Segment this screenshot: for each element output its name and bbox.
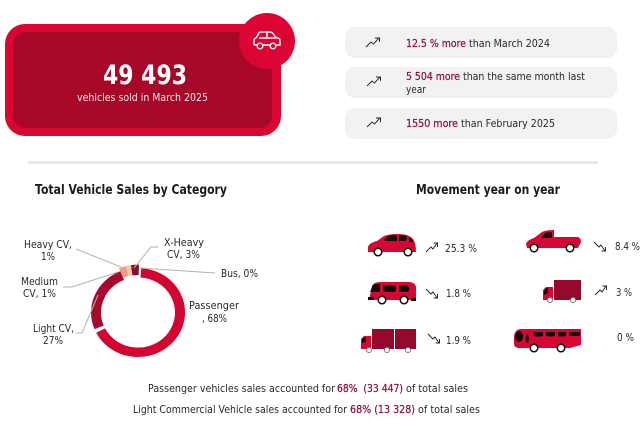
label: light CV: Light CV, xyxy=(33,322,74,335)
icon: long truck xyxy=(361,329,416,352)
label: bus: Bus, 0% xyxy=(221,267,258,280)
panel: change vs same month last year xyxy=(345,67,617,98)
icon: van xyxy=(368,282,416,304)
trend: pickup down xyxy=(594,240,640,253)
icon: bus xyxy=(514,329,581,352)
trend: long truck down: 1.9 % xyxy=(446,334,471,347)
leader lines xyxy=(63,247,215,333)
trend: van down xyxy=(426,287,471,300)
stat text: than the same month last xyxy=(463,70,586,83)
heading: total vehicle sales by category: Total Vehicle Sales by Category xyxy=(35,183,227,198)
note: light commercial share: Light Commercial Vehicle sales accounted for xyxy=(133,403,347,416)
heading: movement year on year: Movement year on year xyxy=(416,183,560,198)
value: bus: 0 % xyxy=(617,331,634,344)
stat text: 5 504 more xyxy=(406,70,460,83)
stat text: 1550 more xyxy=(406,117,458,130)
label: x-heavy CV: X-Heavy xyxy=(164,236,204,249)
trend: small truck up xyxy=(595,286,632,299)
trend: long truck down xyxy=(428,334,471,347)
segment: x-heavy CV xyxy=(132,264,139,276)
label: heavy CV: 1% xyxy=(41,250,55,263)
label: x-heavy CV: CV, 3% xyxy=(167,248,200,261)
label: x-heavy CV xyxy=(164,236,204,261)
label: light CV xyxy=(33,322,74,347)
icon: pickup xyxy=(526,230,581,252)
stat text xyxy=(406,70,586,96)
icon: trend up xyxy=(367,118,380,127)
note: passenger share: Passenger vehicles sales accounted for xyxy=(148,382,335,395)
panel: change vs March 2024 xyxy=(345,27,617,58)
trend: passenger up: 25.3 % xyxy=(445,242,477,255)
label: medium CV: CV, 1% xyxy=(23,287,56,300)
trend: passenger up xyxy=(426,242,477,255)
icon: car badge xyxy=(239,13,295,69)
label: passenger: , 68% xyxy=(202,312,227,325)
panel: total sales hero xyxy=(5,13,295,136)
total number: 49 493 xyxy=(103,60,187,91)
stat text xyxy=(406,37,550,50)
icon: passenger car xyxy=(368,234,416,256)
label: medium CV xyxy=(21,275,58,300)
segment: heavy CV xyxy=(127,265,132,277)
stat text: year xyxy=(406,83,426,96)
segment: passenger xyxy=(101,273,180,352)
total caption: vehicles sold in March 2025 xyxy=(77,91,208,104)
trend: van down: 1.8 % xyxy=(446,287,471,300)
label: heavy CV: Heavy CV, xyxy=(24,238,72,251)
stat text: 12.5 % more xyxy=(406,37,466,50)
note: light commercial share: 68% (13 328) xyxy=(350,403,415,416)
icon: small truck xyxy=(543,280,581,302)
label: heavy CV xyxy=(24,238,72,263)
note: passenger share xyxy=(148,382,468,395)
label: passenger xyxy=(189,299,239,325)
label: light CV: 27% xyxy=(43,334,63,347)
panel: change vs February 2025 xyxy=(345,108,617,139)
icon: trend up xyxy=(366,38,380,47)
chart: category donut xyxy=(63,247,215,352)
note: passenger share: 68% (33 447) xyxy=(337,382,403,395)
label: passenger: Passenger xyxy=(189,299,239,312)
note: light commercial share: of total sales xyxy=(418,403,480,416)
segment: medium CV xyxy=(121,271,127,273)
icon: trend up xyxy=(367,77,380,86)
trend: small truck up: 3 % xyxy=(616,286,632,299)
note: passenger share: of total sales xyxy=(406,382,468,395)
stat text: than February 2025 xyxy=(461,117,555,130)
stat text: than March 2024 xyxy=(469,37,550,50)
stat text xyxy=(406,117,555,130)
label: medium CV: Medium xyxy=(21,275,58,288)
segment: light CV xyxy=(96,276,122,327)
